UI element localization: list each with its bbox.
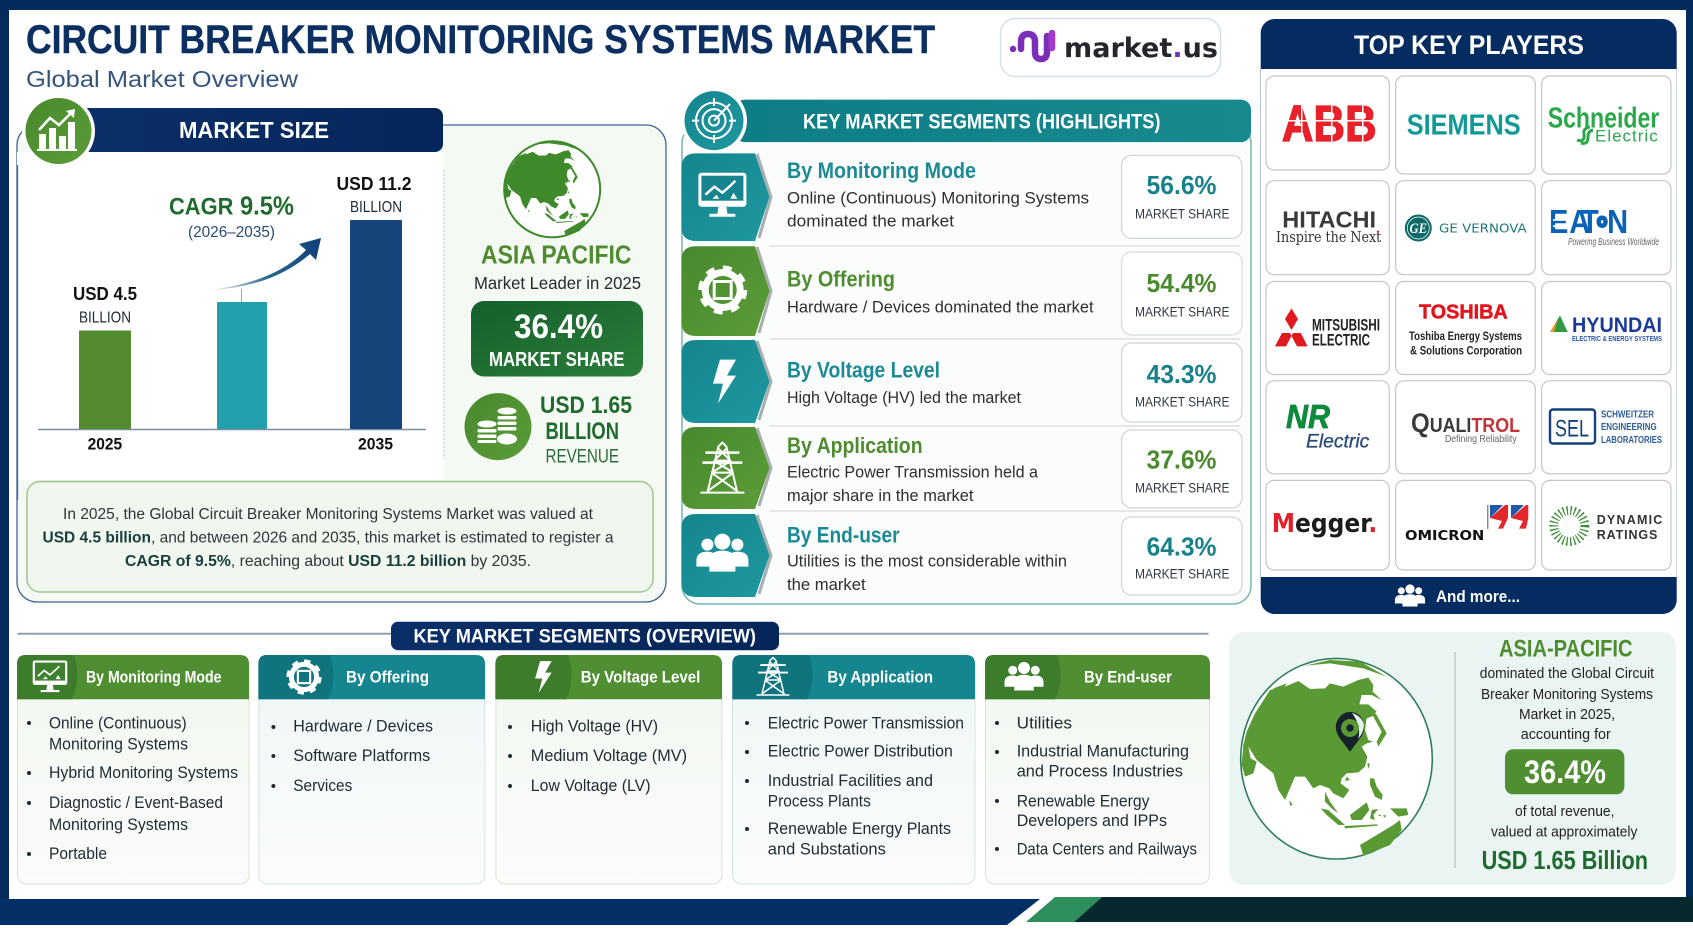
summary box bbox=[27, 482, 653, 592]
logo: Hyundai: ELECTRIC & ENERGY SYSTEMS bbox=[1572, 334, 1662, 343]
segment row: application bbox=[682, 427, 1242, 509]
card heading: By Voltage Level bbox=[581, 668, 700, 687]
row icon: people bbox=[682, 514, 771, 597]
logo: Schneider Electric: Electric bbox=[1595, 127, 1658, 146]
row text: Online (Continuous) Monitoring Systems bbox=[787, 189, 1089, 208]
share card bbox=[1122, 343, 1242, 422]
logo: Toshiba: Toshiba Energy Systems bbox=[1409, 331, 1522, 343]
revenue label: REVENUE bbox=[546, 447, 619, 468]
card list: Portable bbox=[49, 845, 107, 863]
share card: MARKET SHARE bbox=[1135, 566, 1230, 582]
segment row: end-user bbox=[682, 514, 1242, 597]
share card bbox=[1122, 517, 1242, 595]
card: by offering bbox=[258, 655, 485, 884]
icon: growth chart bbox=[22, 94, 95, 168]
panel: asia-pacific callout bbox=[1229, 632, 1676, 885]
logo: Megger: Megger. bbox=[1272, 509, 1377, 539]
icon: target bbox=[681, 88, 747, 154]
logo: SEL: SCHWEITZER bbox=[1601, 410, 1655, 421]
heading: TOP KEY PLAYERS bbox=[1354, 30, 1584, 60]
card list: Industrial Manufacturing bbox=[1017, 743, 1189, 761]
logo: Schneider Electric bbox=[1548, 102, 1659, 146]
region caption: Market Leader in 2025 bbox=[474, 273, 641, 293]
row text: Utilities is the most considerable within bbox=[787, 552, 1067, 571]
icon: tower bbox=[756, 658, 790, 695]
share card bbox=[1122, 155, 1242, 238]
share card: 37.6% bbox=[1146, 445, 1216, 475]
summary line 1: In 2025, the Global Circuit Breaker Monitoring Systems Market was valued at bbox=[63, 506, 594, 523]
logo: Toshiba: & Solutions Corporation bbox=[1410, 345, 1522, 357]
row icon: tower bbox=[682, 427, 771, 509]
card list: Medium Voltage (MV) bbox=[531, 747, 687, 765]
callout heading: ASIA-PACIFIC bbox=[1499, 636, 1632, 663]
callout text: Market in 2025, bbox=[1519, 706, 1615, 723]
logo: Omicron bbox=[1405, 505, 1528, 544]
header bar bbox=[80, 108, 443, 152]
panel: market size bbox=[17, 94, 666, 602]
logo: Eaton: A bbox=[1569, 203, 1590, 240]
callout text: valued at approximately bbox=[1491, 824, 1638, 841]
icon: asia globe bbox=[504, 141, 600, 237]
logo: Qualitrol: Defining Reliability bbox=[1445, 433, 1517, 445]
row text: Hardware / Devices dominated the market bbox=[787, 297, 1094, 316]
card list: Services bbox=[293, 777, 352, 795]
logo: GE Vernova: GE VERNOVA bbox=[1439, 222, 1528, 236]
card: by voltage level bbox=[495, 655, 722, 884]
logo: NR Electric: NR bbox=[1286, 398, 1330, 435]
logo: Eaton: E bbox=[1549, 203, 1568, 240]
logo: SEL: LABORATORIES bbox=[1601, 435, 1662, 446]
CAGR label: CAGR 9.5% bbox=[169, 191, 294, 221]
card list bbox=[745, 714, 964, 858]
heading: MARKET SIZE bbox=[179, 117, 329, 143]
card list: High Voltage (HV) bbox=[531, 718, 658, 736]
share badge: 36.4% bbox=[1524, 754, 1606, 790]
card list: Hybrid Monitoring Systems bbox=[49, 764, 238, 782]
label 2035 value: USD 11.2 bbox=[336, 174, 412, 194]
share badge bbox=[1505, 749, 1624, 794]
share card: MARKET SHARE bbox=[1135, 479, 1230, 495]
logo: Mitsubishi Electric: MITSUBISHI bbox=[1312, 316, 1380, 335]
card list: Software Platforms bbox=[293, 747, 430, 765]
icon: monitor bbox=[33, 660, 67, 692]
row title: By Application bbox=[787, 433, 923, 458]
row title: By Offering bbox=[787, 267, 895, 292]
share label: MARKET SHARE bbox=[489, 349, 624, 371]
icon: market.us mark bbox=[1010, 33, 1052, 59]
logo: Eaton: T bbox=[1581, 203, 1599, 240]
card list: Industrial Facilities and bbox=[768, 772, 933, 790]
CAGR period: (2026–2035) bbox=[188, 224, 275, 241]
revenue figure: USD 1.65 Billion bbox=[1482, 845, 1648, 875]
title: CIRCUIT BREAKER MONITORING SYSTEMS MARKET bbox=[26, 18, 935, 62]
logo: Hitachi: Inspire the Next bbox=[1276, 230, 1381, 246]
share card: 54.4% bbox=[1146, 268, 1216, 298]
logo: Eaton: N bbox=[1607, 203, 1628, 240]
logo: Hitachi bbox=[1276, 206, 1381, 246]
logo: GE Vernova bbox=[1405, 214, 1528, 242]
segment row: monitoring mode bbox=[682, 153, 1242, 241]
card list: Monitoring Systems bbox=[49, 816, 188, 834]
card heading: By End-user bbox=[1084, 668, 1172, 687]
card list bbox=[995, 714, 1197, 858]
card list: Utilities bbox=[1017, 714, 1072, 732]
card list: Online (Continuous) bbox=[49, 714, 187, 732]
summary line 2: USD 4.5 billion, and between 2026 and 2035, this market is estimated to register a bbox=[42, 530, 614, 546]
section heading: overview bbox=[18, 622, 1208, 650]
icon: coins bbox=[464, 393, 532, 460]
header bar bbox=[735, 100, 1251, 142]
callout text: dominated the Global Circuit bbox=[1480, 665, 1655, 682]
logo: market.us bbox=[1000, 18, 1220, 76]
row title: By Voltage Level bbox=[787, 358, 940, 383]
callout text: Breaker Monitoring Systems bbox=[1481, 686, 1653, 703]
segment row: offering bbox=[682, 246, 1242, 336]
segment row: voltage level bbox=[682, 340, 1242, 423]
logo: NR Electric: Electric bbox=[1306, 432, 1370, 453]
icon: people bbox=[1395, 584, 1425, 606]
card: by application bbox=[732, 655, 975, 884]
logo: SEL: ENGINEERING bbox=[1601, 422, 1657, 433]
row icon: monitor bbox=[682, 153, 771, 241]
revenue value: USD 1.65 bbox=[540, 392, 632, 419]
logo: Hyundai bbox=[1550, 314, 1662, 343]
section heading: overview: KEY MARKET SEGMENTS (OVERVIEW) bbox=[414, 627, 756, 648]
card: by end-user bbox=[985, 655, 1210, 884]
label 2025 value: USD 4.5 bbox=[73, 284, 137, 304]
share card bbox=[1122, 252, 1242, 335]
bar 2035 bbox=[350, 220, 402, 429]
logo: Siemens: SIEMENS bbox=[1407, 109, 1521, 141]
logo: Mitsubishi Electric bbox=[1275, 308, 1380, 350]
logo: Qualitrol: QUALITROL bbox=[1411, 408, 1520, 438]
logo: Dynamic Ratings: DYNAMIC bbox=[1597, 513, 1662, 527]
axis label 2035: 2035 bbox=[358, 434, 393, 454]
card list: and Process Industries bbox=[1017, 763, 1183, 781]
logo: Hyundai: HYUNDAI bbox=[1572, 314, 1662, 337]
card list: Process Plants bbox=[768, 793, 871, 811]
card list: Renewable Energy bbox=[1017, 793, 1150, 811]
share card: MARKET SHARE bbox=[1135, 303, 1230, 319]
row title: By Monitoring Mode bbox=[787, 158, 976, 183]
region name: ASIA PACIFIC bbox=[481, 240, 632, 270]
axis label 2025: 2025 bbox=[88, 434, 122, 454]
card list: Monitoring Systems bbox=[49, 735, 188, 753]
logo: Toshiba: TOSHIBA bbox=[1419, 302, 1508, 324]
callout text: of total revenue, bbox=[1515, 803, 1614, 820]
logo: SEL: SEL bbox=[1555, 416, 1589, 442]
logo: Dynamic Ratings bbox=[1554, 510, 1662, 542]
summary line 3: CAGR of 9.5%, reaching about USD 11.2 billion by 2035. bbox=[125, 553, 531, 570]
callout text: accounting for bbox=[1521, 726, 1611, 743]
panel: key market segments highlights bbox=[681, 88, 1251, 604]
share box bbox=[471, 301, 643, 376]
card list bbox=[27, 714, 238, 863]
row icon: bolt bbox=[682, 340, 771, 423]
icon: location pin bbox=[1336, 712, 1364, 752]
revenue unit: BILLION bbox=[546, 418, 619, 445]
logo: SEL bbox=[1550, 410, 1662, 446]
card list: Electric Power Distribution bbox=[768, 743, 953, 761]
card list: Developers and IPPs bbox=[1017, 812, 1167, 830]
card list: Renewable Energy Plants bbox=[768, 820, 951, 838]
card list bbox=[508, 718, 687, 795]
logo: Schneider Electric: Schneider bbox=[1548, 102, 1659, 134]
arrow: CAGR growth bbox=[210, 238, 321, 290]
icon: asia-pacific globe bbox=[1241, 658, 1432, 859]
row text: the market bbox=[787, 575, 866, 594]
logo: Mitsubishi Electric: ELECTRIC bbox=[1312, 331, 1370, 350]
logo: Hitachi: HITACHI bbox=[1282, 206, 1376, 232]
logo: Dynamic Ratings: RATINGS bbox=[1597, 528, 1657, 542]
card list: Electric Power Transmission bbox=[768, 714, 964, 732]
footer band bbox=[0, 897, 1693, 925]
card list: Hardware / Devices bbox=[293, 718, 433, 736]
row title: By End-user bbox=[787, 522, 900, 548]
row icon: gear bbox=[682, 246, 771, 336]
heading: KEY MARKET SEGMENTS (HIGHLIGHTS) bbox=[803, 110, 1160, 134]
logo: Toshiba bbox=[1409, 302, 1522, 357]
card heading: By Application bbox=[827, 668, 933, 687]
share card: 64.3% bbox=[1146, 532, 1216, 562]
label billion: BILLION bbox=[79, 310, 131, 326]
icon: people bbox=[1004, 662, 1044, 690]
chart: market size bars bbox=[38, 174, 426, 454]
row text: Electric Power Transmission held a bbox=[787, 463, 1039, 482]
card list bbox=[271, 718, 433, 795]
logo: Omicron: OMICRON bbox=[1405, 529, 1484, 544]
share card: 56.6% bbox=[1146, 170, 1216, 200]
card list: Diagnostic / Event-Based bbox=[49, 794, 223, 812]
card heading: By Offering bbox=[346, 668, 429, 687]
icon: bolt bbox=[535, 661, 552, 693]
row text: High Voltage (HV) led the market bbox=[787, 388, 1021, 407]
card heading: By Monitoring Mode bbox=[86, 668, 222, 687]
card list: and Substations bbox=[768, 840, 886, 858]
subtitle: Global Market Overview bbox=[26, 66, 298, 92]
bar 2025 bbox=[79, 330, 131, 429]
logo: GE Vernova: GE bbox=[1410, 221, 1427, 237]
card list: Data Centers and Railways bbox=[1017, 840, 1197, 858]
card: by monitoring mode bbox=[17, 655, 249, 884]
logo: Eaton bbox=[1549, 203, 1659, 248]
label billion: BILLION bbox=[350, 199, 402, 216]
share value: 36.4% bbox=[514, 308, 603, 346]
row text: dominated the market bbox=[787, 212, 954, 231]
share card: 43.3% bbox=[1146, 359, 1216, 389]
share card bbox=[1122, 430, 1242, 508]
bar middle bbox=[217, 302, 267, 429]
share card: MARKET SHARE bbox=[1135, 206, 1230, 222]
icon: gear bbox=[288, 661, 320, 693]
and more label: And more... bbox=[1436, 588, 1520, 606]
share card: MARKET SHARE bbox=[1135, 394, 1230, 410]
logo wordmark: market.us bbox=[1064, 33, 1218, 64]
logo: Eaton: O bbox=[1597, 214, 1607, 230]
logo: ABB: ABB bbox=[1282, 95, 1377, 152]
row text: major share in the market bbox=[787, 486, 974, 505]
panel: top key players bbox=[1261, 19, 1677, 614]
card list: Low Voltage (LV) bbox=[531, 777, 650, 795]
logo: NR Electric bbox=[1286, 398, 1370, 453]
